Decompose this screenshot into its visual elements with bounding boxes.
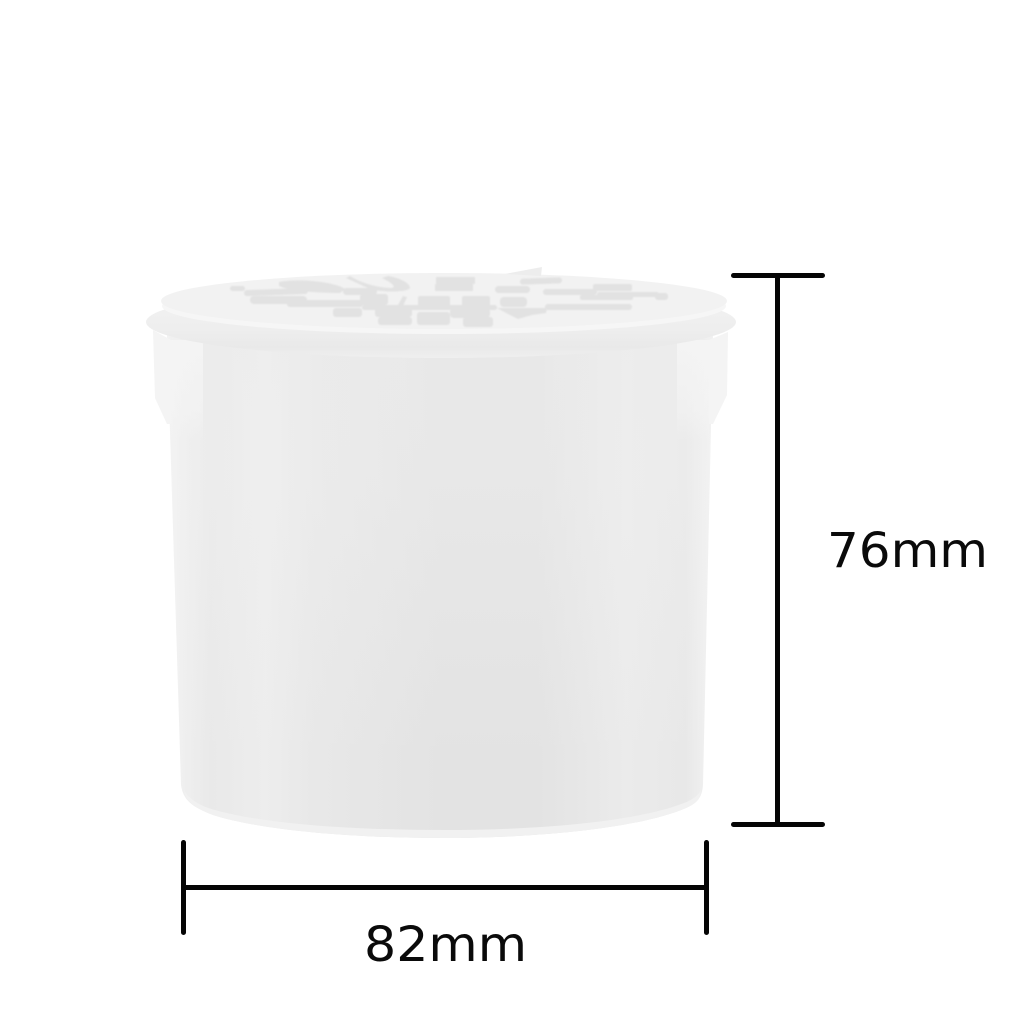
- container body: [167, 335, 713, 838]
- dimension: height label: 76mm: [827, 523, 988, 579]
- dimension: height bracket: [731, 273, 825, 827]
- lid: [161, 267, 727, 334]
- dimension: width label: 82mm: [364, 917, 527, 973]
- left hinge tab: [153, 330, 203, 440]
- product: plastic container: [146, 267, 736, 838]
- lid embossed lettering: [230, 276, 668, 327]
- dimension: width bracket: [181, 840, 709, 935]
- container rim: [146, 286, 736, 358]
- right hinge tab: [677, 332, 728, 440]
